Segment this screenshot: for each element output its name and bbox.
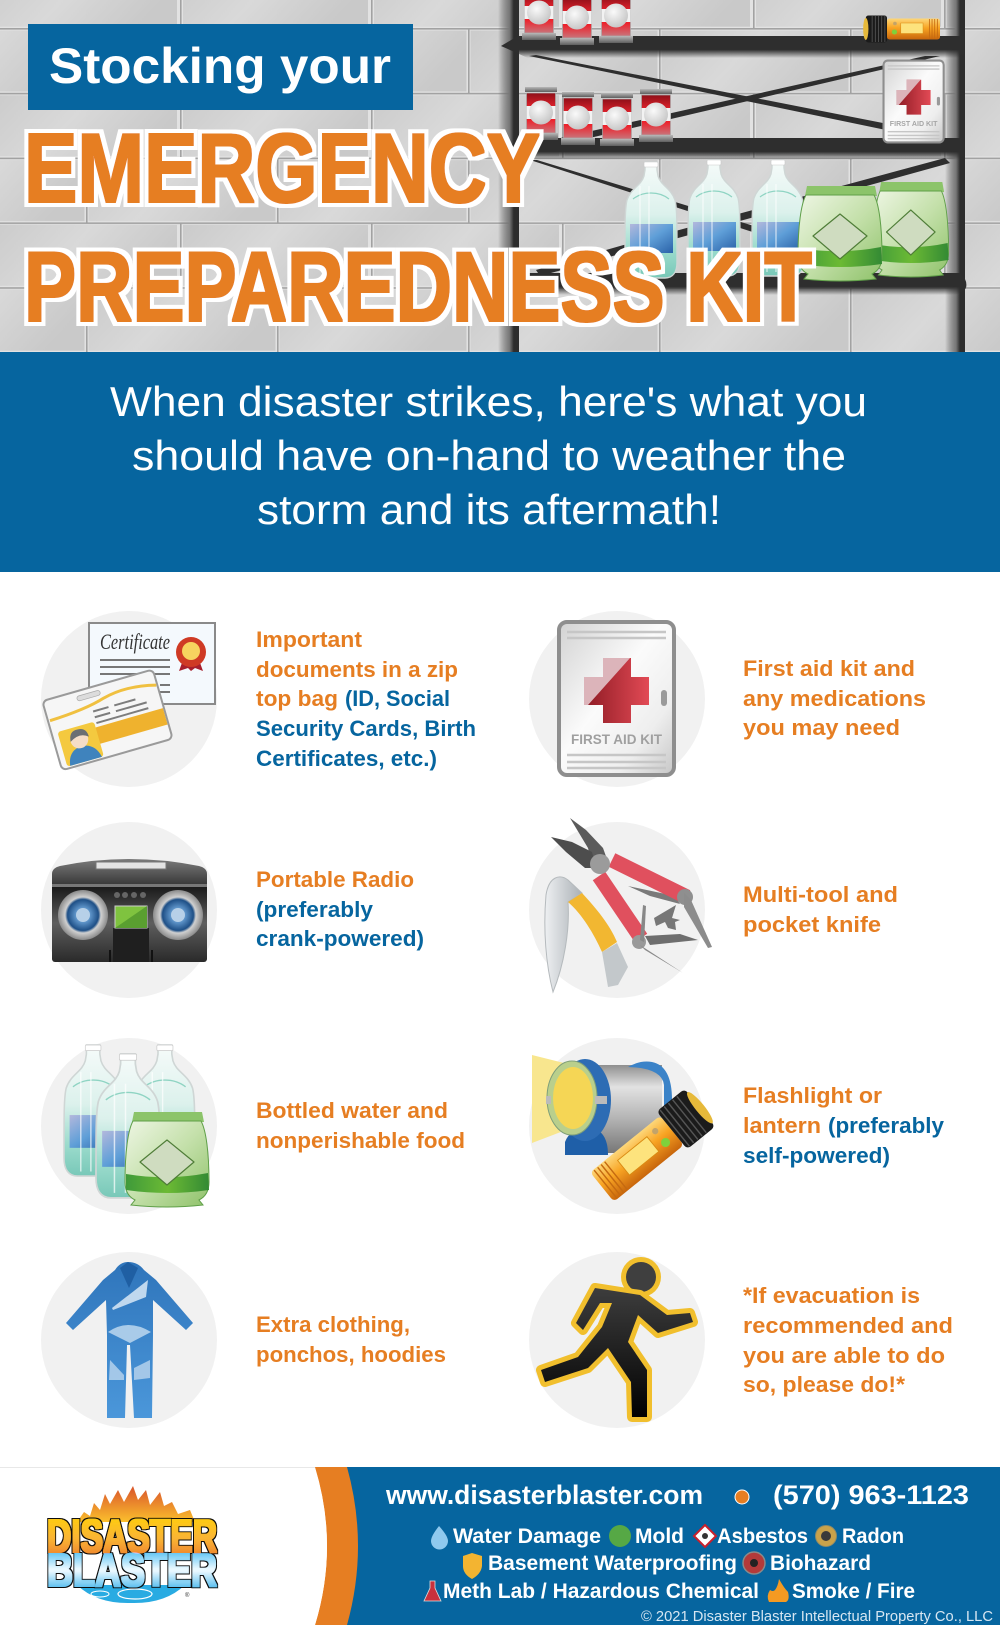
text: first aid [743, 656, 926, 740]
services list [424, 1525, 915, 1603]
icon: biohazard [743, 1552, 765, 1574]
icon: first aid kit: FIRST AID KIT [571, 731, 662, 747]
panel: multi-tool [529, 818, 898, 998]
text: water and food: Bottled water and [256, 1098, 448, 1123]
icon: flame [768, 1579, 789, 1602]
shelf 2 [508, 138, 964, 160]
intro band [0, 352, 1000, 572]
text: multi-tool: pocket knife [743, 912, 881, 937]
panel: first aid [529, 611, 926, 787]
icon: asbestos hazard [694, 1525, 716, 1547]
text: meth lab: Meth Lab / Hazardous Chemical [443, 1580, 759, 1603]
text: flashlight [743, 1083, 944, 1168]
text: water and food [256, 1098, 465, 1153]
icon: shield [463, 1553, 482, 1579]
food bags on shelf [798, 182, 949, 281]
text: radon: Radon [842, 1525, 904, 1548]
flashlight on top shelf [863, 16, 940, 42]
intro band: should have on-hand to weather the [132, 432, 846, 479]
title: emergency preparedness kit: PREPAREDNESS KIT [24, 231, 812, 342]
text: documents: top bag [256, 686, 338, 711]
text: radio [256, 867, 424, 951]
text: documents: (ID, Social [345, 686, 450, 711]
text: documents: documents in a zip [256, 657, 458, 682]
panel: flashlight and lantern [529, 1038, 944, 1214]
text: radio: crank-powered) [256, 926, 424, 951]
logo: disaster blaster [47, 1486, 217, 1603]
text: radio: Portable Radio [256, 867, 414, 892]
water bottles on shelf [625, 160, 804, 278]
icon: mold [609, 1525, 631, 1547]
icon: portable radio [52, 859, 207, 962]
text: clothing: Extra clothing, [256, 1312, 410, 1337]
text: evacuation [743, 1283, 953, 1397]
header wall [0, 0, 1000, 352]
icon: multi-tool and knife [545, 818, 712, 992]
text: clothing [256, 1312, 446, 1367]
text: smoke and fire: Smoke / Fire [792, 1580, 915, 1603]
text: flashlight: lantern [743, 1113, 821, 1138]
icon: certificate and id card: Certificate [100, 629, 170, 654]
text: mold: Mold [635, 1525, 684, 1548]
icon: first aid kit [559, 622, 674, 775]
title box [28, 24, 413, 110]
intro band: When disaster strikes, here's what you [110, 378, 867, 425]
text: first aid: First aid kit and [743, 656, 915, 681]
text: flashlight: (preferably [828, 1113, 944, 1138]
icon: lantern and flashlight [532, 1055, 719, 1206]
title: emergency preparedness kit [24, 113, 812, 342]
text: biohazard: Biohazard [770, 1552, 871, 1575]
panel: water and food [41, 1038, 465, 1214]
contact: website and phone: (570) 963-1123 [773, 1480, 969, 1510]
contact: website and phone: www.disasterblaster.com [385, 1480, 703, 1510]
icon: flask [424, 1581, 441, 1601]
text: evacuation: recommended and [743, 1313, 953, 1338]
copyright: © 2021 Disaster Blaster Intellectual Property Co., LLC [641, 1609, 993, 1625]
text: asbestos: Asbestos [717, 1525, 808, 1548]
text: flashlight: Flashlight or [743, 1083, 882, 1108]
title box: Stocking your [49, 38, 391, 94]
shelf 1 [501, 36, 964, 58]
text: multi-tool: Multi-tool and [743, 882, 898, 907]
shelf 3 [510, 273, 966, 295]
text: documents: Important [256, 627, 363, 652]
text: clothing: ponchos, hoodies [256, 1342, 446, 1367]
first aid kit on shelf: FIRST AID KIT [890, 119, 938, 128]
text: documents [256, 627, 476, 771]
intro band: storm and its aftermath! [257, 486, 721, 533]
cans second shelf [524, 87, 673, 146]
panel: evacuation [529, 1252, 953, 1428]
text: first aid: you may need [743, 715, 900, 740]
text: basement waterproofing: Basement Waterproofing [488, 1552, 737, 1575]
icon: bottles and food bag [64, 1045, 209, 1207]
icon: water drop [431, 1526, 448, 1550]
text: water and food: nonperishable food [256, 1128, 465, 1153]
icon: running figure [541, 1257, 693, 1417]
contact: website and phone [385, 1480, 969, 1510]
logo: disaster blaster: DISASTER [47, 1510, 217, 1562]
footer [0, 1467, 1000, 1625]
panel: clothing [41, 1252, 446, 1428]
panel: radio [41, 822, 424, 998]
icon: blue jumpsuit [66, 1262, 193, 1418]
logo: disaster blaster: ® [185, 1592, 190, 1599]
panel: documents [41, 611, 476, 787]
text: flashlight: self-powered) [743, 1143, 890, 1168]
text: radio: (preferably [256, 897, 373, 922]
icon: certificate and id card [42, 623, 215, 770]
icon: radon [816, 1526, 836, 1546]
text: multi-tool [743, 882, 898, 937]
title: emergency preparedness kit: EMERGENCY [24, 113, 540, 223]
text: documents: Security Cards, Birth [256, 716, 476, 741]
logo: disaster blaster: BLASTER [47, 1544, 217, 1596]
text: water damage: Water Damage [453, 1525, 601, 1548]
text: evacuation: so, please do!* [743, 1372, 905, 1397]
text: evacuation: *If evacuation is [743, 1283, 920, 1308]
text: first aid: any medications [743, 686, 926, 711]
cans top shelf [522, 0, 633, 45]
first aid kit on shelf [884, 61, 944, 142]
text: documents: Certificates, etc.) [256, 746, 437, 771]
shelving unit [498, 0, 966, 352]
text: evacuation: you are able to do [743, 1343, 945, 1368]
